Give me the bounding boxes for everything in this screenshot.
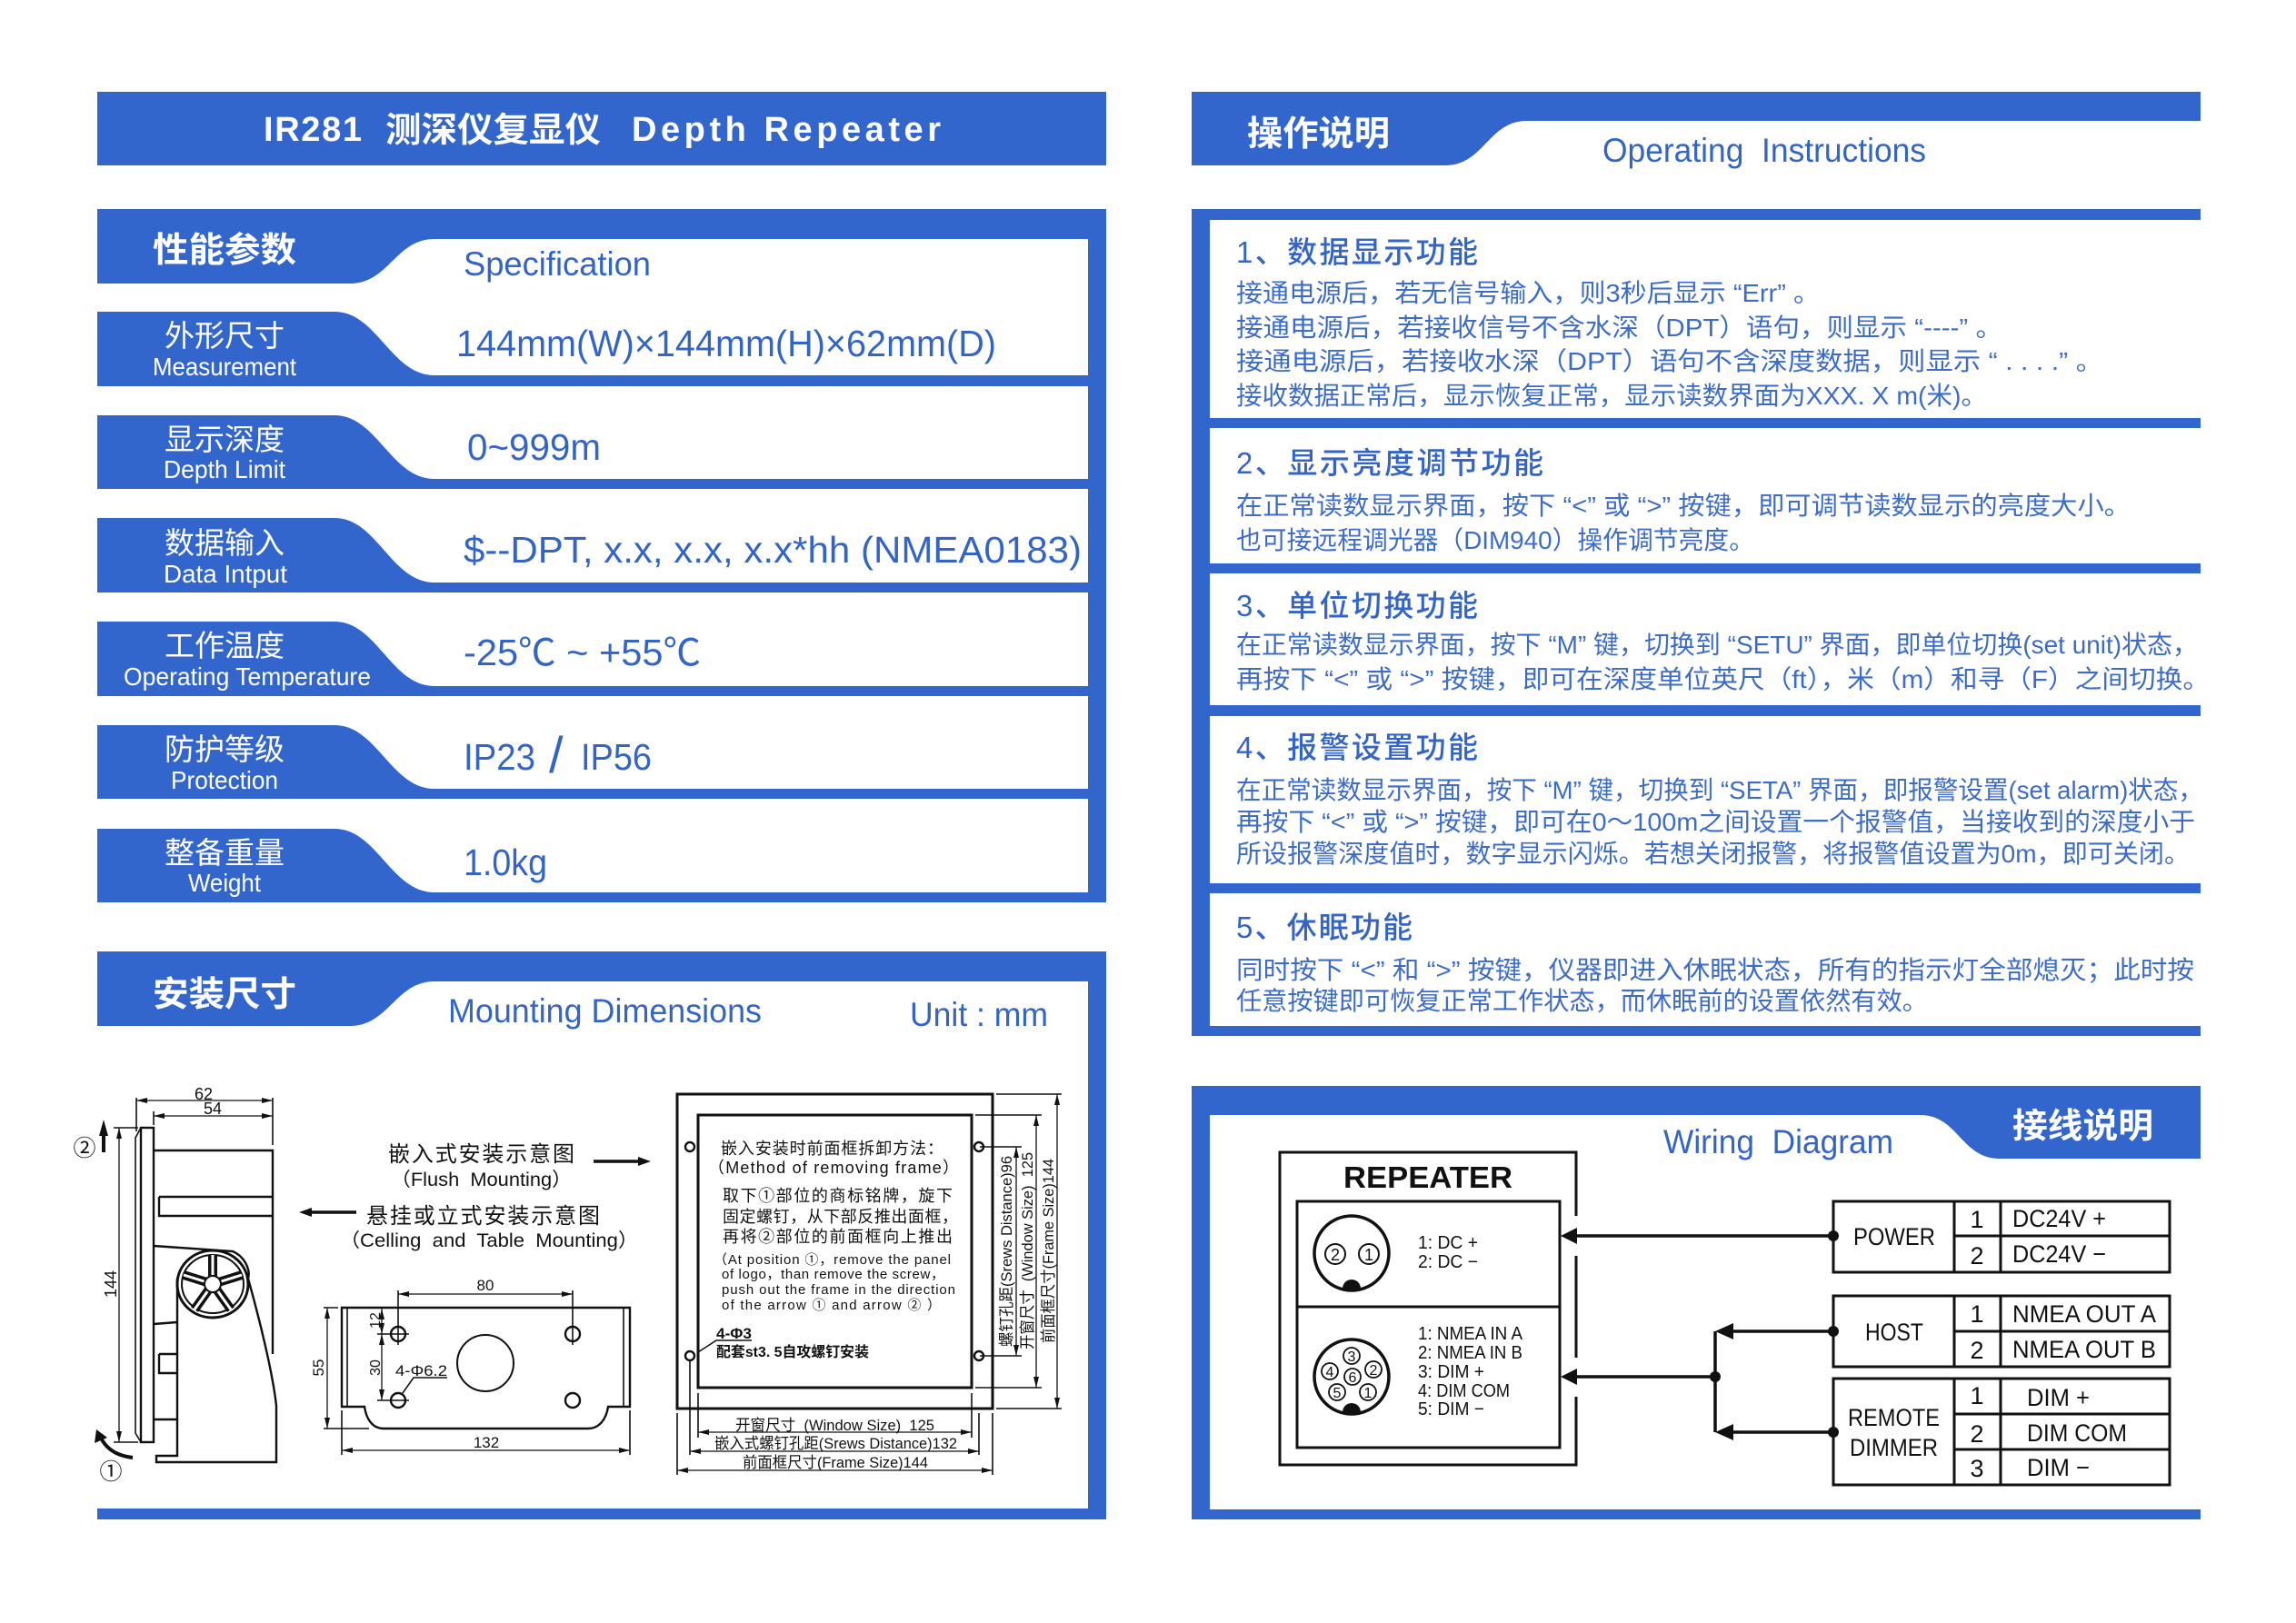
removing frame note: push out the frame in the direction <box>722 1282 955 1298</box>
remote dimmer table: DIM COM <box>2027 1419 2127 1447</box>
removing frame note <box>708 1140 959 1313</box>
wheel <box>177 1250 248 1318</box>
bracket drawing: 132 <box>474 1434 499 1451</box>
section 1: 接通电源后，若无信号输入，则3秒后显示 “Err” 。 <box>1236 279 1820 307</box>
row: protection: / <box>549 726 564 783</box>
row: weight: 整备重量 <box>165 836 285 870</box>
section 3: 在正常读数显示界面，按下 “M” 键，切换到 “SETU” 界面，即单位切换(set unit)状态， <box>1236 631 2198 659</box>
section 1: 1、数据显示功能 <box>1236 235 1478 269</box>
wiring arrows <box>1561 1228 1839 1440</box>
row: measurement: 144mm(W)×144mm(H)×62mm(D) <box>456 323 996 364</box>
data connector: 3 <box>1348 1349 1356 1365</box>
bracket drawing: 4-Φ6.2 <box>395 1362 447 1379</box>
section 5 <box>1236 911 2194 1015</box>
removing frame note: of the arrow ① and arrow ② ） <box>722 1298 941 1313</box>
section 4: 在正常读数显示界面，按下 “M” 键，切换到 “SETA” 界面，即报警设置(set alarm)状态， <box>1236 776 2203 804</box>
host table: NMEA OUT B <box>2012 1336 2156 1363</box>
specification header tab: 性能参数 <box>153 232 296 270</box>
section 5: 5、休眠功能 <box>1236 911 1413 944</box>
section 1: 接通电源后，若接收水深（DPT）语句不含深度数据，则显示 “ . . . .” 。 <box>1236 347 2103 375</box>
host table: HOST <box>1865 1319 1923 1346</box>
side view drawing: 62 <box>195 1085 213 1103</box>
data connector: 5 <box>1333 1386 1342 1401</box>
data connector <box>1314 1324 1523 1419</box>
data connector: 3: DIM + <box>1418 1362 1484 1382</box>
row: weight <box>97 829 1088 902</box>
remote dimmer table: 1 <box>1970 1382 1984 1409</box>
section 3 <box>1236 589 2210 693</box>
row: measurement <box>97 312 1088 386</box>
section 2: 2、显示亮度调节功能 <box>1236 446 1543 480</box>
wiring frame and header <box>1192 1086 2201 1519</box>
screw note <box>698 1325 869 1360</box>
flush mounting drawing: 前面框尺寸(Frame Size)144 <box>1040 1159 1057 1343</box>
flush mounting drawing: 螺钉孔距(Srews Distance)96 <box>998 1156 1015 1347</box>
data connector: 5: DIM − <box>1418 1399 1484 1419</box>
section 1 <box>1236 235 2103 410</box>
section 2: 在正常读数显示界面，按下 “<” 或 “>” 按键，即可调节读数显示的亮度大小。 <box>1236 492 2131 520</box>
removing frame note: 取下①部位的商标铭牌，旋下 <box>723 1187 953 1205</box>
flush mounting drawing <box>677 1094 1062 1475</box>
side view drawing: 144 <box>102 1270 120 1298</box>
flush mounting drawing: 开窗尺寸 (Window Size) 125 <box>735 1417 934 1434</box>
bracket drawing: 12 <box>368 1312 384 1329</box>
power table: DC24V + <box>2012 1205 2106 1232</box>
side view drawing <box>73 1085 276 1485</box>
removing frame note: 嵌入安装时前面框拆卸方法： <box>721 1140 943 1158</box>
data connector: 2: NMEA IN B <box>1418 1343 1522 1363</box>
screw note: 配套st3. 5自攻螺钉安装 <box>716 1343 869 1360</box>
power table: DC24V − <box>2012 1240 2106 1268</box>
row: data input: $--DPT, x.x, x.x, x.x*hh (NMEA0183) <box>464 529 1082 571</box>
marker 1 and curved arrow <box>95 1429 133 1485</box>
panel: operating instructions header <box>1192 92 2201 169</box>
specification header tab: Specification <box>464 245 651 283</box>
flush mounting drawing: 前面框尺寸(Frame Size)144 <box>743 1454 928 1471</box>
section 5: 同时按下 “<” 和 “>” 按键，仪器即进入休眠状态，所有的指示灯全部熄灭；此时按 <box>1236 956 2194 984</box>
panel: operating instructions header: Operating Instructions <box>1602 132 1926 169</box>
section 1: 接通电源后，若接收信号不含水深（DPT）语句，则显示 “----” 。 <box>1236 314 2002 342</box>
mounting captions with arrows: （Flush Mounting） <box>391 1170 572 1190</box>
section 1: 接收数据正常后，显示恢复正常，显示读数界面为XXX. X m(米)。 <box>1236 382 1987 410</box>
mounting captions with arrows: 悬挂或立式安装示意图 <box>366 1204 600 1229</box>
data connector: 1: NMEA IN A <box>1418 1324 1523 1344</box>
removing frame note: 再将②部位的前面框向上推出 <box>723 1228 953 1246</box>
screw note: 4-Φ3 <box>716 1325 752 1342</box>
marker 2 and up arrow: ② <box>73 1136 96 1161</box>
power connector <box>1314 1216 1478 1291</box>
removing frame note: （Method of removing frame） <box>708 1159 959 1177</box>
section 5: 任意按键即可恢复正常工作状态，而休眠前的设置依然有效。 <box>1236 987 1928 1015</box>
flush mounting drawing: 开窗尺寸 (Window Size) 125 <box>1019 1152 1036 1349</box>
remote dimmer table: 2 <box>1970 1420 1984 1448</box>
remote dimmer table: DIMMER <box>1850 1434 1938 1461</box>
section 4: 再按下 “<” 或 “>” 按键，即可在0～100m之间设置一个报警值，当接收到的深度小于 <box>1236 808 2195 836</box>
mounting panel frame and header: Unit : mm <box>910 996 1048 1033</box>
host table: 2 <box>1970 1337 1984 1364</box>
host table: NMEA OUT A <box>2012 1300 2156 1328</box>
section 3: 3、单位切换功能 <box>1236 589 1478 622</box>
mounting panel frame and header: Mounting Dimensions <box>448 992 762 1030</box>
removing frame note: of logo，than remove the screw， <box>722 1267 944 1282</box>
row: measurement: Measurement <box>153 353 296 381</box>
data connector: 4 <box>1326 1365 1334 1380</box>
panel: wiring diagram <box>1192 1086 2201 1519</box>
mounting captions with arrows <box>299 1142 651 1251</box>
section 2: 也可接远程调光器（DIM940）操作调节亮度。 <box>1236 526 1754 554</box>
data connector: 6 <box>1349 1370 1357 1386</box>
mounting captions with arrows: 嵌入式安装示意图 <box>388 1142 574 1167</box>
row: depth limit: 显示深度 <box>165 423 285 456</box>
panel: operating instructions <box>1192 209 2210 1036</box>
remote dimmer table: DIM + <box>2027 1384 2090 1411</box>
host table: 1 <box>1970 1300 1984 1328</box>
row: data input: Data Intput <box>164 560 287 588</box>
mounting captions with arrows: （Celling and Table Mounting） <box>340 1230 638 1251</box>
panel: specification <box>97 209 1106 902</box>
removing frame note: 固定螺钉，从下部反推出面框， <box>723 1208 958 1226</box>
row: operating temperature: 工作温度 <box>165 629 285 662</box>
removing frame note: （At position ①，remove the panel <box>714 1252 951 1268</box>
power connector: 2 <box>1331 1246 1340 1264</box>
power connector: 1: DC + <box>1418 1233 1478 1253</box>
power table <box>1833 1201 2170 1272</box>
bracket drawing: 55 <box>310 1359 327 1376</box>
wiring frame and header: 接线说明 <box>2012 1108 2153 1146</box>
host table <box>1833 1296 2170 1367</box>
section 2 <box>1236 446 2131 554</box>
title banner: IR281 <box>264 111 362 149</box>
panel: operating instructions header: 操作说明 <box>1247 115 1390 154</box>
power connector: 2: DC − <box>1418 1252 1478 1272</box>
row: operating temperature: -25℃ ~ +55℃ <box>464 632 701 673</box>
section 4 <box>1236 731 2203 868</box>
panel: mounting dimensions <box>73 951 1106 1519</box>
marker 2 and up arrow <box>73 1120 108 1161</box>
row: protection: IP23 <box>464 736 535 778</box>
row: depth limit: Depth Limit <box>164 455 285 483</box>
power table: 2 <box>1970 1242 1984 1270</box>
remote dimmer table: 3 <box>1970 1455 1984 1482</box>
title banner: 测深仪复显仪 <box>385 112 601 150</box>
row: weight: Weight <box>188 869 261 897</box>
power table: 1 <box>1970 1206 1984 1233</box>
bracket drawing: 80 <box>477 1277 494 1294</box>
flush mounting drawing: 嵌入式螺钉孔距(Srews Distance)132 <box>714 1435 957 1452</box>
section 4: 所设报警深度值时，数字显示闪烁。若想关闭报警，将报警值设置为0m，即可关闭。 <box>1236 840 2190 868</box>
data connector: 4: DIM COM <box>1418 1381 1510 1401</box>
row: protection: 防护等级 <box>165 732 285 766</box>
power table: POWER <box>1853 1223 1935 1250</box>
row: data input: 数据输入 <box>165 526 285 560</box>
row: protection: IP56 <box>581 736 652 778</box>
row: protection: Protection <box>171 766 278 794</box>
wiring frame and header: Wiring Diagram <box>1663 1123 1893 1160</box>
row: measurement: 外形尺寸 <box>165 319 285 353</box>
mounting panel frame and header: 安装尺寸 <box>153 976 296 1014</box>
row: depth limit <box>97 415 1088 489</box>
remote dimmer table <box>1833 1379 2170 1485</box>
row: operating temperature: Operating Temperature <box>124 662 371 691</box>
data connector: 2 <box>1370 1363 1378 1379</box>
title banner <box>97 92 1106 165</box>
specification header tab <box>97 209 1106 902</box>
power connector: 1 <box>1364 1246 1373 1264</box>
row: protection <box>97 725 1088 799</box>
repeater box <box>1280 1152 1576 1465</box>
remote dimmer table: REMOTE <box>1848 1404 1940 1431</box>
mounting panel frame and header <box>97 951 1106 1519</box>
row: operating temperature <box>97 622 1088 696</box>
side view drawing: 54 <box>204 1100 222 1118</box>
title banner: Depth Repeater <box>632 111 941 149</box>
data connector: 1 <box>1364 1386 1373 1401</box>
section 3: 再按下 “<” 或 “>” 按键，即可在深度单位英尺（ft），米（m）和寻（F）之间切换。 <box>1236 665 2210 693</box>
row: weight: 1.0kg <box>464 841 547 883</box>
bracket drawing: 30 <box>368 1359 384 1376</box>
section 4: 4、报警设置功能 <box>1236 731 1478 764</box>
marker 1 and curved arrow: ① <box>99 1459 123 1485</box>
row: depth limit: 0~999m <box>467 426 601 468</box>
repeater box: REPEATER <box>1343 1160 1512 1194</box>
bracket drawing <box>310 1277 630 1455</box>
remote dimmer table: DIM − <box>2027 1454 2090 1481</box>
row: data input <box>97 518 1088 592</box>
